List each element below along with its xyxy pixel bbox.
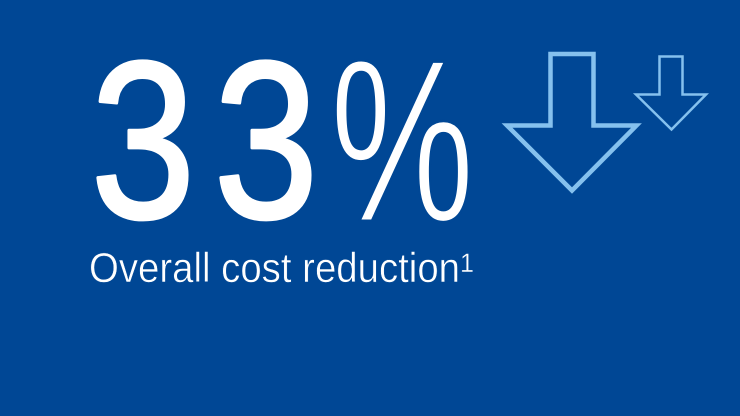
big stat: 33%: 3 — [91, 15, 195, 265]
big stat: 33% — [91, 12, 474, 271]
icon: large down arrow — [507, 54, 636, 190]
caption: overall cost reduction: Overall cost reduction — [89, 244, 460, 291]
footnote marker: 1 — [460, 248, 474, 278]
icon: small down arrow — [636, 56, 706, 130]
percent sign: % — [330, 12, 474, 271]
big stat: 33%: 3 — [214, 15, 318, 265]
